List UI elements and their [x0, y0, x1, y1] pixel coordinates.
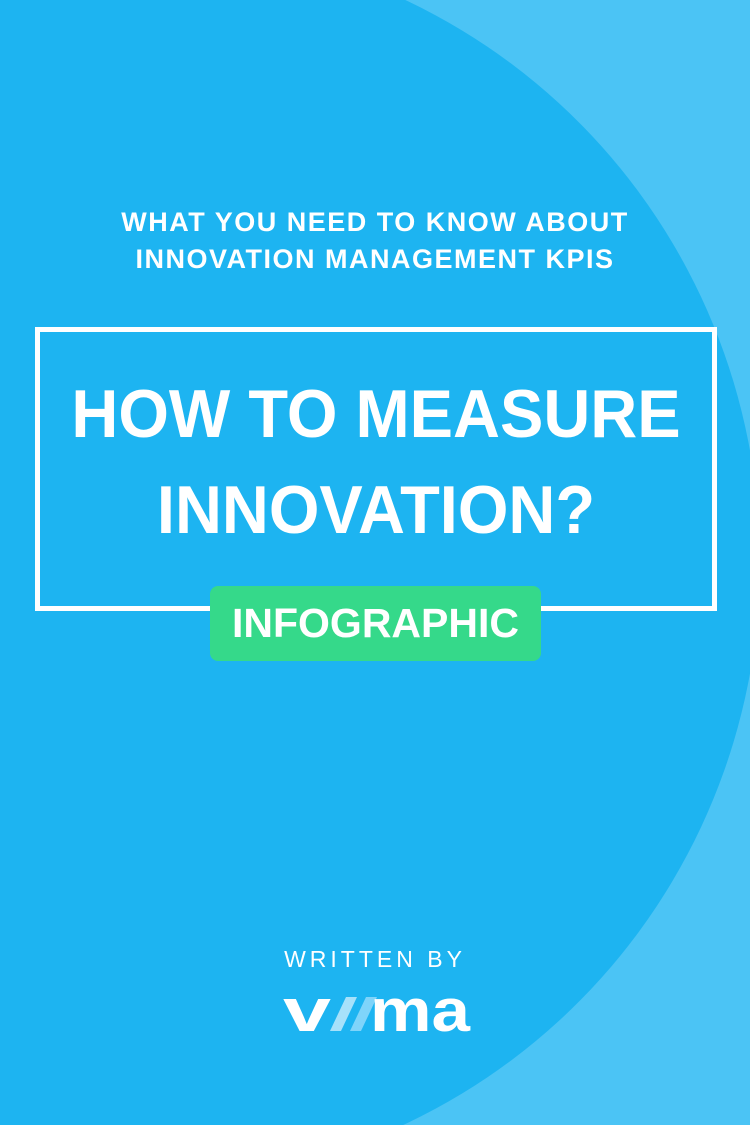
title: INNOVATION?	[157, 472, 595, 548]
title frame	[35, 327, 717, 611]
title	[71, 376, 681, 548]
title: HOW TO MEASURE	[71, 376, 681, 452]
subtitle: WHAT YOU NEED TO KNOW ABOUT	[121, 207, 629, 237]
subtitle	[121, 207, 629, 274]
subtitle: INNOVATION MANAGEMENT KPIS	[135, 244, 614, 274]
logo: viima	[283, 985, 471, 1037]
badge: infographic: INFOGRAPHIC	[232, 600, 519, 646]
written by: WRITTEN BY	[284, 946, 466, 972]
badge: infographic	[210, 586, 541, 661]
